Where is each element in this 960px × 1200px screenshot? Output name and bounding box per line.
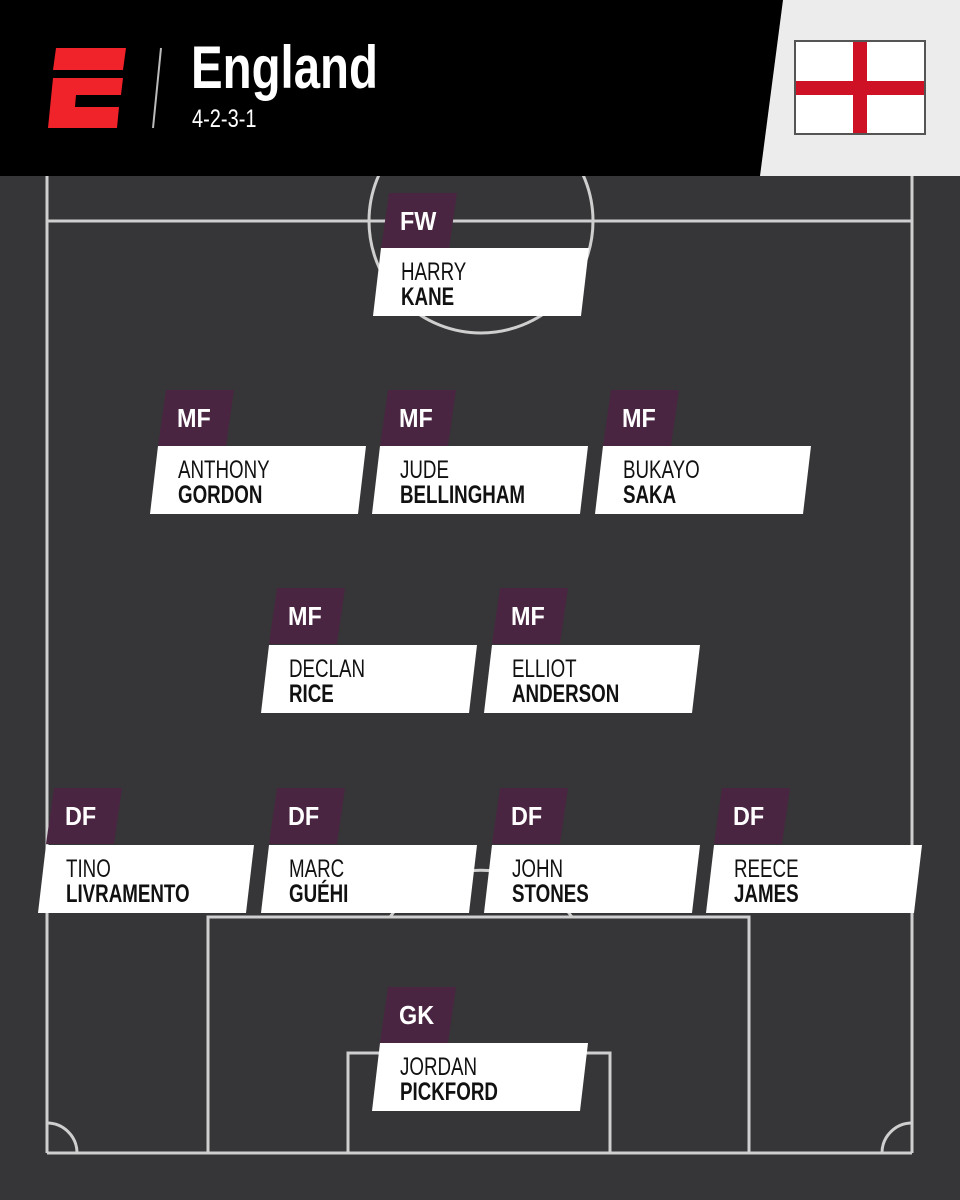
player: Rice: MF — [288, 601, 322, 631]
player: James: DF — [733, 801, 764, 831]
player: Bellingham: BELLINGHAM — [400, 481, 525, 509]
player: Anderson: MF — [511, 601, 545, 631]
player: Kane: FW — [400, 206, 436, 236]
player: Kane — [373, 193, 589, 316]
player: James: REECE — [734, 855, 799, 883]
subtitle: formation: 4-2-3-1 — [192, 105, 256, 133]
player: Anderson: ELLIOT — [512, 655, 577, 683]
player: Kane: HARRY — [401, 258, 466, 286]
player: Saka — [595, 390, 811, 514]
player: Anderson: ANDERSON — [512, 680, 619, 708]
player: Bellingham: JUDE — [400, 456, 449, 484]
player: Gordon: MF — [177, 403, 211, 433]
player: Rice: DECLAN — [289, 655, 365, 683]
icon: England flag — [794, 40, 926, 135]
player: Stones: STONES — [512, 880, 589, 908]
player: Gordon — [150, 390, 366, 514]
player: Guehi — [261, 788, 477, 913]
player: Guehi: MARC — [289, 855, 344, 883]
player: Stones: JOHN — [512, 855, 563, 883]
player: Guehi: GUÉHI — [289, 880, 348, 908]
player: Gordon: GORDON — [178, 481, 262, 509]
player: Bellingham — [372, 390, 588, 514]
player: Livramento: DF — [65, 801, 96, 831]
player: Rice — [261, 588, 477, 713]
player: Livramento: TINO — [66, 855, 111, 883]
player: Pickford: PICKFORD — [400, 1078, 498, 1106]
header — [0, 0, 960, 176]
player: Livramento: LIVRAMENTO — [66, 880, 190, 908]
player: Bellingham: MF — [399, 403, 433, 433]
player: Saka: MF — [622, 403, 656, 433]
player: Saka: SAKA — [623, 481, 676, 509]
player: Pickford — [372, 987, 588, 1111]
icon: ESPN logo — [48, 48, 126, 128]
player: Guehi: DF — [288, 801, 319, 831]
player: James: JAMES — [734, 880, 799, 908]
player: Stones: DF — [511, 801, 542, 831]
player: Rice: RICE — [289, 680, 334, 708]
divider — [152, 48, 162, 128]
player: James — [706, 788, 922, 913]
flag panel — [760, 0, 960, 176]
player: Anderson — [484, 588, 700, 713]
player: Livramento — [38, 788, 254, 913]
player: Pickford: JORDAN — [400, 1053, 477, 1081]
player: Stones — [484, 788, 700, 913]
player: Pickford: GK — [399, 1000, 434, 1030]
player: Kane: KANE — [401, 283, 454, 311]
player: Saka: BUKAYO — [623, 456, 700, 484]
player: Gordon: ANTHONY — [178, 456, 270, 484]
title: England — [191, 34, 378, 101]
